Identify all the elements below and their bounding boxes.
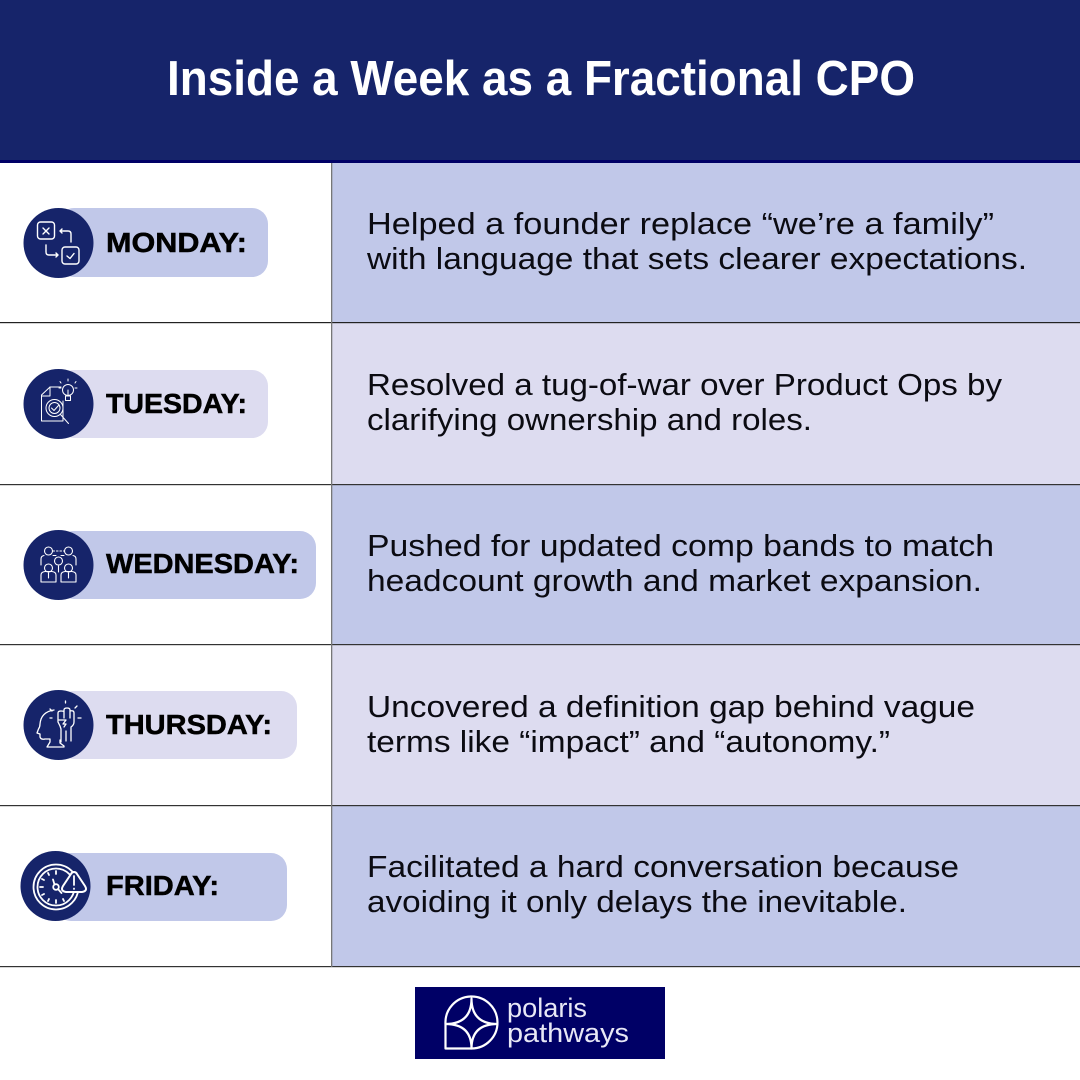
Friday label: FRIDAY: (106, 870, 219, 901)
Tuesday description: Resolved a tug-of-war over Product Ops by (367, 367, 1003, 402)
Thursday pill (58, 691, 297, 759)
icon: decision flow (24, 208, 94, 278)
Friday description (367, 849, 959, 919)
Wednesday description: Pushed for updated comp bands to match (367, 528, 994, 563)
Monday row (24, 206, 1027, 278)
logo wordmark: polaris (507, 993, 587, 1023)
panel: Wednesday description background (332, 485, 1080, 644)
icon: clock with warning triangle (20, 851, 90, 921)
Monday description (366, 206, 1027, 276)
Tuesday row (24, 367, 1003, 439)
Monday pill (58, 208, 268, 277)
panel: Tuesday description background (332, 323, 1080, 484)
Friday description: avoiding it only delays the inevitable. (367, 884, 907, 919)
icon: document with lightbulb and magnifier (24, 369, 94, 439)
panel: Friday description background (332, 806, 1080, 966)
panel: Thursday description background (332, 645, 1080, 805)
Friday row (20, 849, 959, 921)
Tuesday pill (58, 370, 268, 438)
Monday description: with language that sets clearer expectations. (366, 241, 1027, 276)
Wednesday pill (58, 531, 316, 599)
Wednesday label: WEDNESDAY: (106, 548, 299, 579)
Wednesday description (367, 528, 994, 598)
Wednesday row (24, 528, 994, 600)
Tuesday description: clarifying ownership and roles. (367, 402, 812, 437)
title: Inside a Week as a Fractional CPO (167, 52, 915, 106)
icon: team of people (24, 530, 94, 600)
Thursday description: Uncovered a definition gap behind vague (367, 689, 975, 724)
header band (0, 0, 1080, 163)
Friday pill (55, 853, 287, 921)
logo: polaris pathways (415, 987, 665, 1059)
panel: Monday description background (332, 163, 1080, 322)
Monday description: Helped a founder replace “we’re a family” (367, 206, 994, 241)
logo wordmark: pathways (507, 1018, 629, 1048)
icon: logo star mark (445, 996, 498, 1048)
Friday description: Facilitated a hard conversation because (367, 849, 959, 884)
logo wordmark (507, 993, 629, 1048)
Monday label: MONDAY: (106, 227, 247, 258)
Thursday row (24, 689, 975, 760)
Thursday description: terms like “impact” and “autonomy.” (367, 724, 890, 759)
Thursday label: THURSDAY: (106, 709, 272, 740)
Tuesday description (367, 367, 1003, 437)
Tuesday label: TUESDAY: (106, 388, 247, 419)
icon: head with raised fist (24, 690, 94, 760)
Wednesday description: headcount growth and market expansion. (367, 563, 982, 598)
Thursday description (367, 689, 975, 759)
